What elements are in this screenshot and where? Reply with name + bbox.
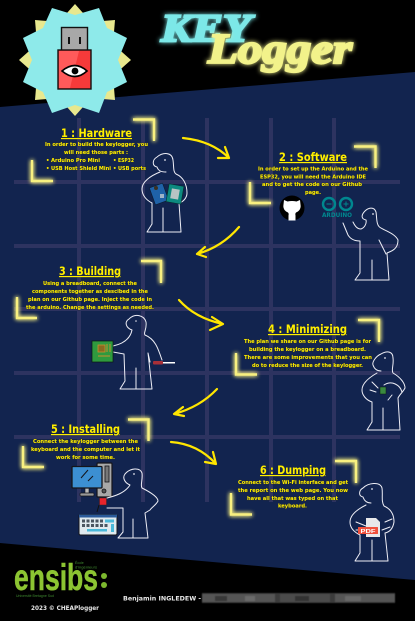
authors with blurred names: Benjamin INGLEDEW - xyxy=(123,596,201,602)
arrow: 1 to 2 xyxy=(183,138,229,158)
text: step 1 description: USB Host Shield Mini xyxy=(51,166,111,172)
text: step 5 description: Connect the keylogger between the xyxy=(33,439,138,445)
heading: step 5: 5 : Installing xyxy=(51,422,120,436)
text: step 1 description: • xyxy=(46,158,49,164)
text: step 1 description: USB ports xyxy=(118,166,146,172)
heading: step 3: 3 : Building xyxy=(59,264,121,278)
icon: PDF document xyxy=(358,518,380,537)
text: step 5 description: work for some time. xyxy=(56,455,115,461)
text: step 6 description: have all that was typed on that xyxy=(247,496,338,502)
icon: keyboard xyxy=(79,514,117,535)
text: step 1 description: will need those parts : xyxy=(64,150,128,156)
panel: step 1 hardware xyxy=(32,120,187,232)
figure: man waving xyxy=(343,208,398,280)
heading: step 6: 6 : Dumping xyxy=(260,463,326,477)
text: step 2 description: ESP32, you will need the Arduino IDE xyxy=(260,174,366,180)
text: step 1 description: Arduino Pro Mini xyxy=(51,158,100,164)
text: step 4 description xyxy=(244,339,372,369)
text: step 6 description xyxy=(238,480,348,510)
text: step 5 description xyxy=(31,439,140,461)
figure: man with tiny board xyxy=(362,352,405,430)
text: step 3 description: plan on our Github page. Inject the code in xyxy=(28,297,152,303)
arrow: 5 to 6 xyxy=(171,442,216,464)
logo: ensibs: Université Bretagne Sud xyxy=(16,594,54,598)
logo: ensibs: École xyxy=(75,560,84,565)
icon: keylogger xyxy=(97,498,106,512)
text: step 4 description: do to reduce the size of the keylogger. xyxy=(252,363,363,369)
icon: monitor xyxy=(72,466,102,496)
text: step 1 description: In order to build the keylogger, you xyxy=(45,142,148,148)
arrow: 2 to 3 xyxy=(197,227,239,257)
text: step 6 description: the report on the web page. You now xyxy=(238,488,348,494)
text: step 3 description: the arduino. Change the settings as needed. xyxy=(26,305,154,311)
text: step 3 description: Using a breadboard, connect the xyxy=(43,281,137,287)
figure: man holding boards xyxy=(142,154,187,232)
logo: ensibs: ensibs xyxy=(14,557,98,598)
text: step 1 description xyxy=(45,142,148,172)
text: step 3 description: components together as descibed in the xyxy=(32,289,148,295)
figure: man plugging keylogger xyxy=(107,469,158,538)
text: step 4 description: building the keylogger on a breadboard. xyxy=(249,347,366,353)
title: KEY: KEY xyxy=(160,7,255,50)
icon: Arduino: ARDUINO xyxy=(322,212,352,219)
icon: GitHub xyxy=(280,196,304,220)
heading: step 4: 4 : Minimizing xyxy=(268,322,347,336)
arrow: 3 to 4 xyxy=(179,300,223,330)
figure: man holding PDF xyxy=(350,483,394,561)
panel: step 3 building xyxy=(17,261,175,389)
icon: USB keylogger badge xyxy=(19,4,131,116)
text: step 1 description: • xyxy=(113,158,116,164)
title: Logger: Logger xyxy=(207,27,353,73)
text: step 6 description: keyboard. xyxy=(278,504,307,510)
figure: man with board and screwdriver xyxy=(92,315,162,389)
text: step 5 description: keyboard and the computer and let it xyxy=(31,447,140,453)
heading: step 1: 1 : Hardware xyxy=(61,126,132,140)
text: step 6 description: Connect to the Wi-Fi interface and get xyxy=(238,480,348,486)
authors with blurred names xyxy=(123,593,395,603)
arrow: 4 to 5 xyxy=(174,389,217,416)
heading: step 2: 2 : Software xyxy=(279,150,347,164)
copyright: 2023 © CHEAPlogger xyxy=(31,604,100,612)
panel: step 5 installing xyxy=(23,420,158,538)
text: step 4 description: There are some improvements that you can xyxy=(244,355,372,361)
logo: ensibs: d'ingénieurs xyxy=(75,566,97,570)
icon: computer tower xyxy=(97,463,112,497)
text: step 2 description xyxy=(258,166,368,196)
icon: PDF document: PDF xyxy=(360,529,376,535)
text: step 1 description: • xyxy=(46,166,49,172)
text: step 2 description: page. xyxy=(305,190,321,196)
text: step 4 description: The plan we share on our Github page is for xyxy=(244,339,371,345)
panel: step 2 software xyxy=(250,146,398,280)
text: step 1 description: ESP32 xyxy=(118,158,134,164)
text: step 1 description: • xyxy=(113,166,116,172)
text: step 3 description xyxy=(26,281,154,311)
panel: step 4 minimizing xyxy=(236,320,405,430)
panel: step 6 dumping xyxy=(231,461,394,561)
text: step 2 description: In order to set up the Arduino and the xyxy=(258,166,368,172)
text: step 2 description: and to get the code on our Github xyxy=(262,182,362,188)
icon: Arduino xyxy=(322,198,352,219)
icon: screwdriver xyxy=(153,361,175,364)
